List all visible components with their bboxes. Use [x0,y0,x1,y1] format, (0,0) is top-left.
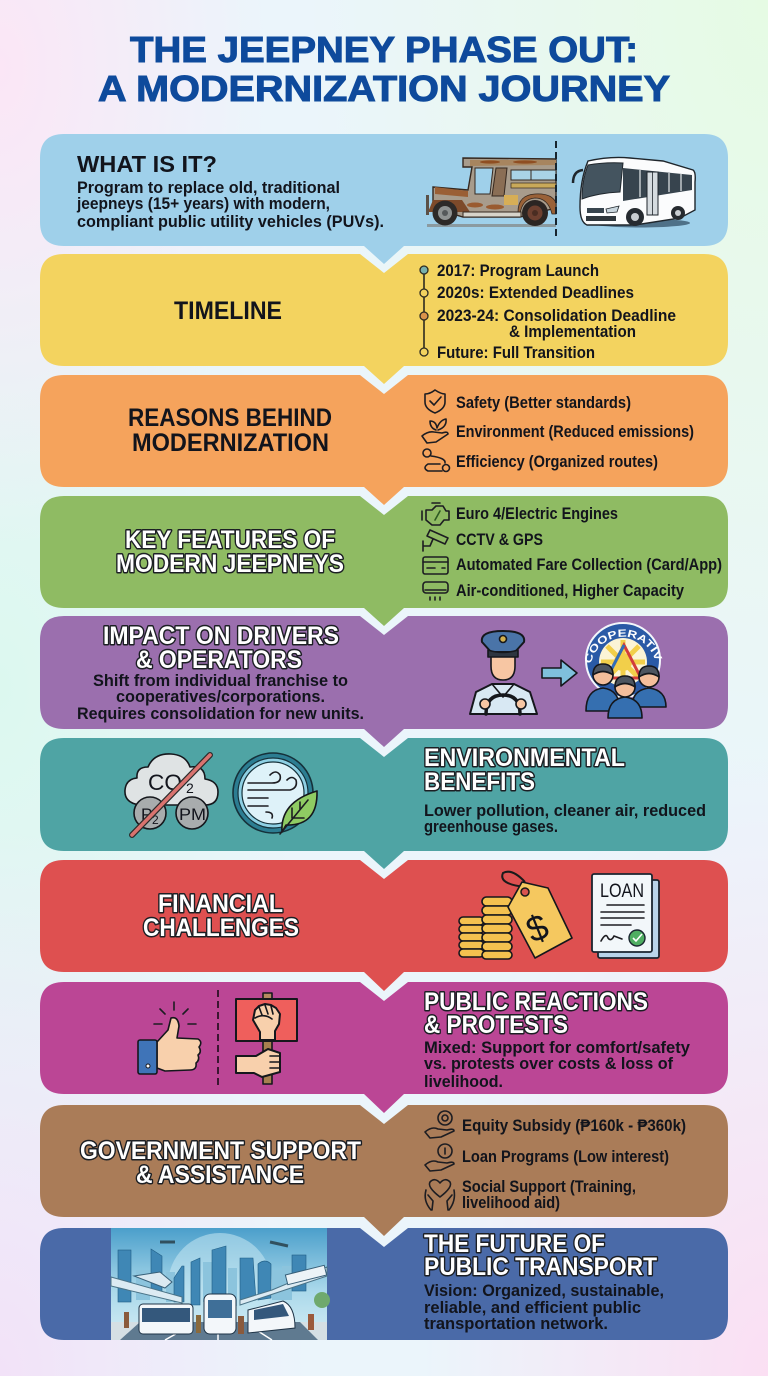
text: reasons list: Efficiency (Organized routes) [456,452,658,471]
heading: public reactions [424,988,648,1039]
heading: environmental benefits [424,744,625,796]
heading: government support [80,1137,361,1189]
text: reasons list: Safety (Better standards) [456,393,631,412]
icon: crossed-out emissions cloud [125,754,218,835]
text: environmental description: greenhouse gases. [424,817,558,836]
heading: impact: IMPACT ON DRIVERS [103,622,339,650]
title: A MODERNIZATION JOURNEY [98,68,670,109]
text: government support list: livelihood aid) [462,1193,560,1212]
icon: engine [422,503,449,525]
icon: subsidy hand with coin [425,1111,454,1138]
heading: government support: GOVERNMENT SUPPORT [80,1137,361,1165]
heading: reasons: MODERNIZATION [132,429,329,457]
heading: future of public transport: PUBLIC TRANSPORT [424,1253,657,1281]
text: public reactions description [424,1038,691,1091]
text: future vision: transportation network. [424,1314,608,1333]
icon: cooperative badge with members: COOPERATIVE [584,629,662,662]
text: impact description: Shift from individual franchise to [93,671,348,690]
text: timeline entries: 2023-24: Consolidation Deadline [437,306,676,325]
title: THE JEEPNEY PHASE OUT: [130,29,638,70]
heading: key features [116,526,344,578]
text: timeline entries [437,261,676,362]
panel: key features [40,496,728,626]
heading: impact [103,622,339,674]
icon: crossed-out emissions cloud: 2 [186,780,194,796]
heading: impact: & OPERATORS [136,646,302,674]
icon: efficiency route [423,449,450,472]
text: public reactions description: Mixed: Support for comfort/safety [424,1038,691,1057]
text: features list: Euro 4/Electric Engines [456,504,618,523]
heading: financial challenges [143,890,299,942]
text: features list [456,504,722,600]
text: program description: compliant public utility vehicles (PUVs). [77,212,384,231]
icon: clean air with leaf [233,753,317,834]
text: government support list: Social Support (Training, [462,1177,636,1196]
text: program description [76,178,384,231]
text: future vision: Vision: Organized, sustainable, [424,1281,664,1300]
panel: reasons behind modernization [40,375,728,505]
heading: timeline: TIMELINE [174,297,282,325]
icon: air conditioner [423,582,448,600]
chart: timeline dots and line [420,266,428,356]
icon: crossed-out emissions cloud: 2 [152,813,159,827]
icon: cctv camera [423,530,448,551]
heading: future of public transport [424,1230,657,1281]
icon: loan document: LOAN [600,881,644,902]
icon: jeepney driver [470,631,537,714]
panel: future of public transport [40,1228,728,1340]
title [98,29,670,109]
divider: dashed old versus new [555,141,557,238]
text: features list: CCTV & GPS [456,530,543,549]
heading: financial challenges: CHALLENGES [143,914,299,942]
icon: dollar price tag: $ [520,905,554,951]
heading: public reactions: & PROTESTS [424,1011,568,1039]
heading: reasons [128,404,332,457]
heading: reasons: REASONS BEHIND [128,404,332,432]
panel: government support [40,1105,728,1236]
icon: crossed-out emissions cloud: P [141,805,152,824]
text: features list: Automated Fare Collection (Card/App) [456,555,722,574]
panel: impact on drivers and operators [40,616,728,747]
icon: safety shield [425,390,445,413]
text: future vision [424,1281,664,1333]
icon: protest sign and fists [236,993,297,1084]
text: impact description: cooperatives/corporations. [116,687,325,706]
icon: cooperative badge with members [584,622,667,719]
icon: environment hand and leaf [422,419,448,443]
text: environmental description [424,801,706,836]
icon: crossed-out emissions cloud: PM [179,805,206,824]
heading: public reactions: PUBLIC REACTIONS [424,988,648,1016]
icon: loan hand with coin [425,1144,454,1171]
text: program description: Program to replace old, traditional [77,178,340,197]
heading: key features: KEY FEATURES OF [125,526,335,554]
icon: caring hands with heart [425,1180,454,1210]
text: public reactions description: livelihood. [424,1072,503,1091]
panel: public reactions and protests [40,982,728,1113]
heading: what is it: WHAT IS IT? [77,151,217,177]
illustration: future city transport [111,1228,330,1340]
divider: dashed support versus protest [217,990,219,1086]
heading: financial challenges: FINANCIAL [158,890,283,918]
text: impact description: Requires consolidation for new units. [77,704,364,723]
text: government support list [462,1116,686,1212]
panel: financial challenges [40,860,728,991]
icon: modern white bus [573,157,695,228]
text: reasons list [456,393,694,471]
icon: loan document [592,874,659,958]
text: program description: jeepneys (15+ years) with modern, [76,194,330,213]
icon: old rusty jeepney [426,158,556,227]
panel: what is it [40,134,728,264]
icon: coin stacks [459,897,512,959]
icon: crossed-out emissions cloud: CO [148,770,182,795]
icon: payment card [423,557,448,574]
panel: environmental benefits [40,738,728,869]
arrow: driver to cooperative [542,660,577,686]
text: reasons list: Environment (Reduced emissions) [456,422,694,441]
text: features list: Air-conditioned, Higher Capacity [456,581,684,600]
text: impact description [77,671,364,723]
text: timeline entries: 2017: Program Launch [437,261,599,280]
heading: key features: MODERN JEEPNEYS [116,550,344,578]
icon: thumbs up [138,1002,201,1074]
text: future vision: reliable, and efficient public [424,1298,641,1317]
text: timeline entries: & Implementation [509,322,636,341]
heading: future of public transport: THE FUTURE OF [424,1230,605,1258]
heading: government support: & ASSISTANCE [136,1161,304,1189]
heading: environmental benefits: BENEFITS [424,768,535,796]
text: government support list: Loan Programs (Low interest) [462,1147,669,1166]
icon: dollar price tag [502,872,572,958]
panel: timeline [40,254,728,384]
text: government support list: Equity Subsidy (₱160k - ₱360k) [462,1116,686,1135]
text: timeline entries: 2020s: Extended Deadlines [437,283,634,302]
text: environmental description: Lower pollution, cleaner air, reduced [424,801,706,820]
text: public reactions description: vs. protests over costs & loss of [424,1054,673,1073]
text: timeline entries: Future: Full Transition [437,343,595,362]
heading: environmental benefits: ENVIRONMENTAL [424,744,625,772]
